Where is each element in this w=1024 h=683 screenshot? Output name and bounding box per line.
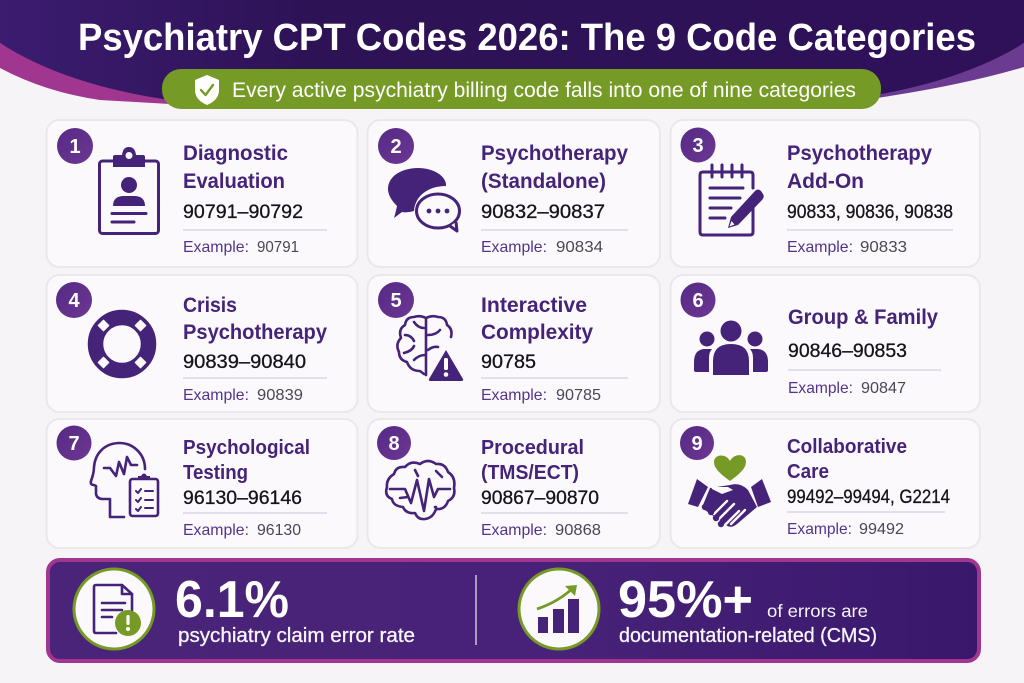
example code <box>183 387 303 404</box>
example code <box>183 239 299 256</box>
example code: 96130 <box>257 522 301 539</box>
example code: 90868 <box>555 522 601 539</box>
value: 6.1% <box>175 571 289 629</box>
code range: 90839–90840 <box>183 351 306 373</box>
icon: heart over handshake <box>688 455 771 527</box>
example code: Example: <box>183 522 249 539</box>
category name: Crisis <box>183 293 237 317</box>
panel: card 1 diagnostic evaluation <box>46 120 358 267</box>
description: psychiatry claim error rate <box>178 625 415 647</box>
badge 4 <box>56 282 92 318</box>
subtitle text: Every active psychiatry billing code falls into one of nine categories <box>232 78 856 102</box>
example code <box>481 239 603 256</box>
badge 5 <box>378 282 414 318</box>
description: documentation-related (CMS) <box>619 625 877 647</box>
code range: 96130–96146 <box>183 487 302 509</box>
stat: claim error rate <box>74 569 415 649</box>
title: Psychiatry CPT Codes 2026: The 9 Code Categories <box>78 17 976 59</box>
description: of errors are <box>767 601 868 621</box>
category name: Psychotherapy <box>787 141 932 165</box>
category name: Psychotherapy <box>183 320 327 344</box>
category name: Diagnostic <box>183 141 288 165</box>
example code: 99492 <box>859 521 904 538</box>
example code: Example: <box>481 387 547 404</box>
category name <box>787 141 932 193</box>
category name: Interactive <box>481 293 587 317</box>
category name: Collaborative <box>787 435 907 458</box>
subtitle pill <box>162 69 881 109</box>
icon: document with alert <box>74 569 154 649</box>
example code: Example: <box>787 521 852 538</box>
icon: rising bar chart <box>519 569 599 649</box>
panel: card 5 interactive complexity <box>368 275 660 412</box>
icon: group of people <box>694 320 768 375</box>
code range: 90791–90792 <box>183 201 303 223</box>
example code <box>481 387 601 404</box>
category name <box>481 436 584 484</box>
category name <box>787 435 907 483</box>
example code: 90785 <box>556 387 601 404</box>
badge 6 <box>680 282 716 318</box>
badge 9 <box>680 426 714 460</box>
value: 95%+ <box>618 571 753 629</box>
badge 6: 6 <box>692 290 704 312</box>
example code: Example: <box>183 387 249 404</box>
example code: 90791 <box>257 239 299 256</box>
panel: card 6 group and family <box>670 275 980 412</box>
example code <box>481 522 601 539</box>
panel: card 8 procedural tms ect <box>368 419 660 548</box>
code range: 99492–99494, G2214 <box>787 486 950 508</box>
panel: card 2 psychotherapy standalone <box>368 120 660 267</box>
icon: notepad and pencil <box>700 165 764 235</box>
icon: clipboard with person <box>100 147 158 234</box>
category name <box>481 141 628 193</box>
example code: Example: <box>788 380 853 397</box>
category name: Complexity <box>481 320 593 344</box>
panel: card 9 collaborative care <box>670 419 980 548</box>
category name: (TMS/ECT) <box>481 461 579 484</box>
panel: card 3 psychotherapy add-on <box>670 120 980 267</box>
example code: Example: <box>787 239 853 256</box>
category name <box>183 141 288 193</box>
code range: 90846–90853 <box>788 340 907 362</box>
example code <box>787 521 904 538</box>
example code: Example: <box>481 522 547 539</box>
code range: 90867–90870 <box>481 487 599 509</box>
panel: statistics banner <box>48 560 979 661</box>
badge 9: 9 <box>691 433 703 455</box>
example code <box>788 380 906 397</box>
code range: 90785 <box>481 351 536 373</box>
category name: Psychotherapy <box>481 141 628 165</box>
category name: Procedural <box>481 436 584 459</box>
category name: (Standalone) <box>481 169 606 193</box>
example code <box>183 522 301 539</box>
icon: head with clipboard <box>91 443 158 517</box>
example code: 90833 <box>860 239 907 256</box>
badge 1: 1 <box>69 136 81 158</box>
badge 5: 5 <box>390 290 402 312</box>
badge 4: 4 <box>68 290 80 312</box>
category name <box>481 293 593 344</box>
code range: 90832–90837 <box>481 201 605 223</box>
category name: Group & Family <box>788 305 938 329</box>
badge 7 <box>56 426 92 460</box>
badge 7: 7 <box>68 433 80 455</box>
code range: 90833, 90836, 90838 <box>787 201 953 223</box>
category name <box>183 436 310 484</box>
icon: shield check <box>195 75 219 105</box>
badge 8: 8 <box>388 433 400 455</box>
stat: documentation errors <box>519 569 877 649</box>
panel: card 7 psychological testing <box>46 419 358 548</box>
example code: 90847 <box>861 380 906 397</box>
example code: Example: <box>481 239 547 256</box>
category name: Add-On <box>787 169 864 193</box>
badge 8 <box>377 426 411 460</box>
badge 3: 3 <box>692 135 704 157</box>
example code <box>787 239 907 256</box>
category name: Testing <box>183 461 248 484</box>
header banner <box>0 0 1024 106</box>
category name: Evaluation <box>183 169 285 193</box>
category name: Psychological <box>183 436 310 459</box>
example code: 90834 <box>556 239 603 256</box>
badge 1 <box>57 128 93 164</box>
description <box>619 601 877 647</box>
panel: card 4 crisis psychotherapy <box>46 275 358 412</box>
badge 3 <box>680 128 716 162</box>
badge 2 <box>378 128 414 164</box>
icon: brain with warning <box>397 316 463 381</box>
category name <box>183 293 327 344</box>
icon: chat bubbles <box>388 168 460 231</box>
example code: 90839 <box>257 387 303 404</box>
example code: Example: <box>183 239 249 256</box>
category name: Care <box>787 460 829 483</box>
icon: brain with pulse <box>386 461 454 519</box>
icon: lifebuoy <box>96 318 148 370</box>
badge 2: 2 <box>390 136 402 158</box>
